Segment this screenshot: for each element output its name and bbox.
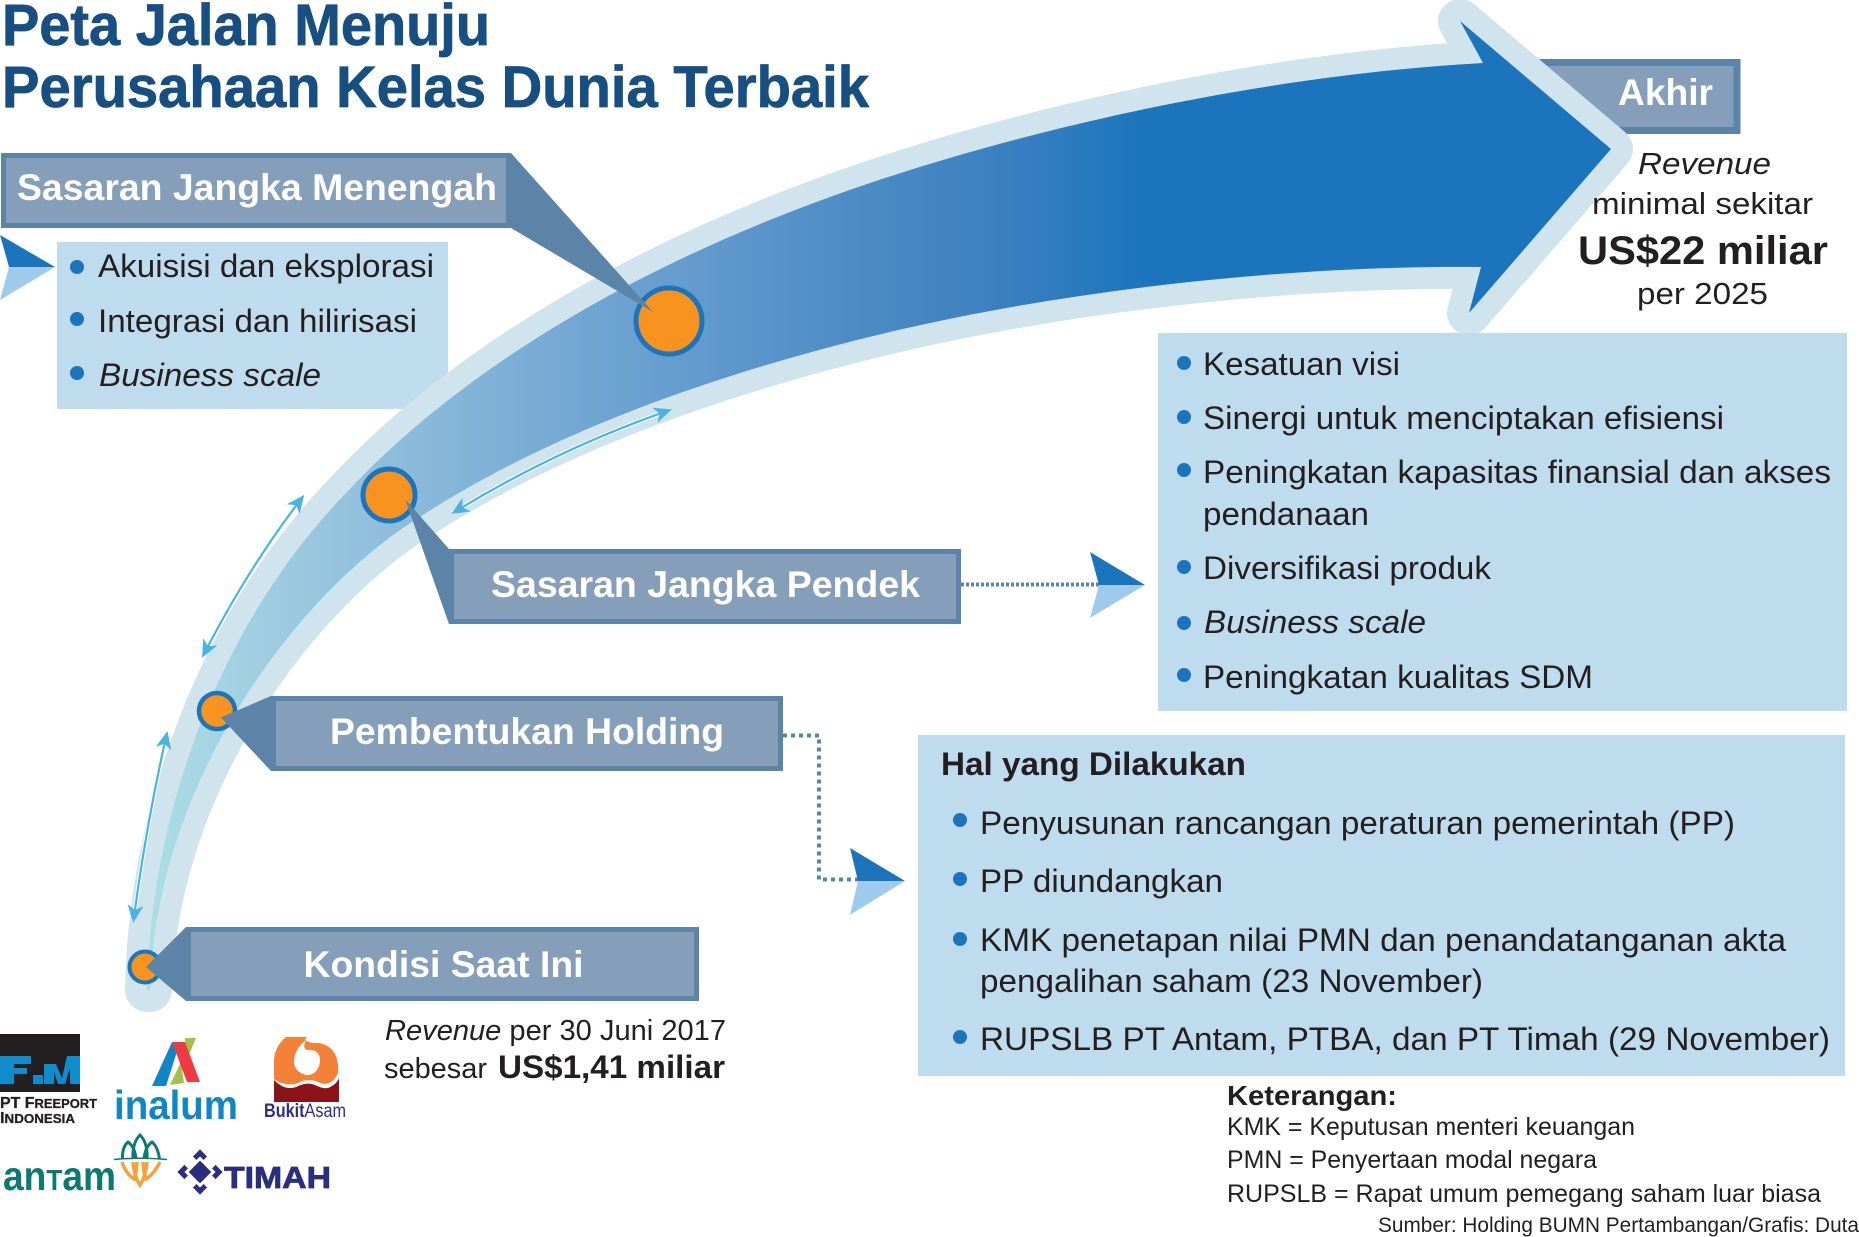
label: pembentukan holding: Pembentukan Holding <box>330 711 724 752</box>
label: kondisi saat ini: Kondisi Saat Ini <box>304 944 584 985</box>
main curved arrow <box>147 21 1611 990</box>
logo: Bukit Asam: BukitAsam <box>264 1101 346 1122</box>
label: sasaran jangka pendek <box>405 499 958 624</box>
panel: sasaran jangka pendek list: Diversifikasi produk <box>1203 550 1492 586</box>
milestone: sasaran jangka menengah circle <box>636 288 702 354</box>
logo: PT Freeport Indonesia <box>0 1034 97 1127</box>
list items: Integrasi dan hilirisasi <box>98 303 417 339</box>
logo: PT Freeport Indonesia: INDONESIA <box>0 1110 76 1127</box>
legend: keterangan: PMN = Penyertaan modal negara <box>1227 1146 1597 1174</box>
logo: Timah: TIMAH <box>224 1161 331 1195</box>
logo: Bukit Asam <box>264 1037 346 1122</box>
list items: KMK penetapan nilai PMN dan penandatanganan akta <box>980 922 1786 958</box>
panel: sasaran jangka pendek list: Sinergi untuk menciptakan efisiensi <box>1203 400 1724 436</box>
title <box>2 0 870 120</box>
panel: sasaran jangka pendek list <box>1158 333 1847 711</box>
legend: keterangan <box>1227 1080 1821 1208</box>
source: Sumber: Holding BUMN Pertambangan/Grafis: Duta <box>1378 1214 1859 1237</box>
text: revenue target: minimal sekitar <box>1592 186 1813 221</box>
double arrow: second stage <box>203 496 303 656</box>
heading: Hal yang Dilakukan <box>941 746 1246 782</box>
list items: PP diundangkan <box>980 863 1223 899</box>
label: pembentukan holding <box>221 696 780 771</box>
logo: Antam <box>3 1135 167 1199</box>
text: current revenue: sebesar <box>384 1053 487 1085</box>
list items: Akuisisi dan eksplorasi <box>98 248 434 284</box>
text: current revenue: Revenue per 30 Juni 2017 <box>385 1015 726 1047</box>
icon: arrow to list <box>0 235 55 300</box>
label: akhir <box>1503 62 1737 130</box>
logo: Timah <box>181 1153 331 1195</box>
panel: sasaran jangka menengah list <box>0 235 448 409</box>
logo: Inalum: inalum <box>114 1082 238 1128</box>
double arrow: third stage <box>453 410 670 513</box>
logo: Inalum <box>114 1038 238 1128</box>
list items: RUPSLB PT Antam, PTBA, dan PT Timah (29 November) <box>980 1021 1830 1057</box>
list items: pengalihan saham (23 November) <box>980 963 1483 999</box>
list items: Business scale <box>99 357 321 393</box>
title: Perusahaan Kelas Dunia Terbaik <box>2 55 870 120</box>
label: sasaran jangka menengah <box>4 153 653 312</box>
panel: sasaran jangka pendek list: Business scale <box>1204 604 1426 640</box>
label: kondisi saat ini <box>146 927 696 1001</box>
text: current revenue <box>384 1015 726 1085</box>
panel: sasaran jangka pendek list: Peningkatan kualitas SDM <box>1203 659 1593 695</box>
legend: keterangan: KMK = Keputusan menteri keuangan <box>1227 1113 1635 1141</box>
panel: sasaran jangka pendek list: pendanaan <box>1203 496 1369 532</box>
legend: keterangan: Keterangan: <box>1227 1080 1397 1111</box>
text: revenue target: Revenue <box>1638 146 1771 181</box>
text: revenue target: US$22 miliar <box>1578 229 1828 273</box>
label: sasaran jangka menengah: Sasaran Jangka Menengah <box>17 167 497 208</box>
arrow: dotted connector to hal yang dilakukan <box>783 736 905 915</box>
list items <box>70 248 434 393</box>
logo: PT Freeport Indonesia: PT FREEPORT <box>0 1095 97 1112</box>
list items: Penyusunan rancangan peraturan pemerintah (PP) <box>980 805 1735 841</box>
panel: hal yang dilakukan <box>918 735 1845 1076</box>
panel: sasaran jangka pendek list: Kesatuan visi <box>1203 346 1400 382</box>
label: sasaran jangka pendek: Sasaran Jangka Pendek <box>491 564 920 605</box>
label: akhir: Akhir <box>1618 72 1713 113</box>
text: revenue target <box>1578 146 1828 311</box>
text: revenue target: per 2025 <box>1637 276 1768 311</box>
milestone: kondisi saat ini circle <box>130 952 160 982</box>
panel: sasaran jangka pendek list: Peningkatan kapasitas finansial dan akses <box>1203 454 1831 490</box>
arrow: dotted connector to pendek list <box>961 552 1145 618</box>
milestone: sasaran jangka pendek circle <box>363 469 415 521</box>
logo: Antam: antam <box>3 1153 116 1199</box>
text: current revenue: US$1,41 miliar <box>498 1049 725 1085</box>
milestone: pembentukan holding circle <box>199 693 235 729</box>
legend: keterangan: RUPSLB = Rapat umum pemegang saham luar biasa <box>1227 1180 1821 1208</box>
list items <box>953 805 1830 1057</box>
double arrow: first stage <box>134 733 167 921</box>
